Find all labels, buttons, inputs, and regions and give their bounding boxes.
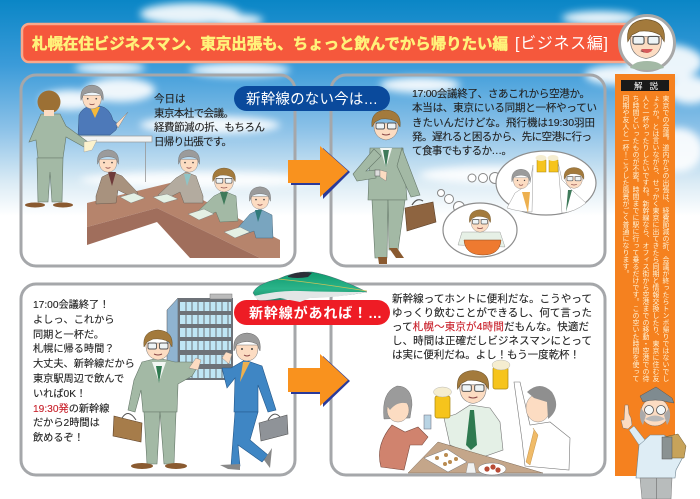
arrow: bottom [288, 354, 350, 407]
speech text: 大丈夫、新幹線だから [33, 357, 135, 370]
sidebar vertical text: 東京での会議。道内からの出張は、経費節減の折、会議が終ったらトンボ帰りではないでし [661, 95, 668, 382]
sidebar vertical text: ょうか。とは言いながら、せっかく東京に出てきたら同期と情報交換したり、東京に住む友 [651, 95, 658, 382]
icon: man in green suit waving [128, 330, 201, 469]
icon: standing man from behind [25, 90, 97, 208]
speech text: ゆっくり飲むことができるし、何て言った [392, 306, 592, 319]
panel: drinking before shinkansen [21, 284, 295, 475]
speech text: って札幌～東京が4時間だもんな。快適だ [392, 321, 589, 333]
panel: flying back without shinkansen [331, 75, 605, 266]
speech text: 飲めるぞ！ [33, 431, 84, 444]
speech text: 今日は [154, 92, 186, 105]
icon: man with orange tie raising beer [492, 360, 570, 470]
speech text: 日帰り出張です。 [154, 135, 232, 148]
icon: seated managers [96, 150, 273, 238]
icon: office building [167, 294, 233, 380]
thought bubble: eating ramen [438, 190, 517, 257]
speech text: きたいんだけどな。飛行機は19:30羽田 [412, 116, 595, 129]
speech text: 新幹線ってホントに便利だな。こうやって [392, 292, 592, 305]
speech text: 東京駅周辺で飲んで [33, 372, 124, 385]
speech text: 東京本社で会議。 [154, 106, 234, 120]
table documents [120, 193, 250, 238]
icon: woman with glass [379, 386, 431, 470]
label: without shinkansen [234, 86, 390, 111]
speech text: 札幌に帰る時間？ [33, 342, 114, 355]
title tag: [ビジネス編] [515, 34, 608, 52]
thought bubble: beer toast [468, 151, 596, 215]
conference table [87, 183, 280, 258]
sidebar vertical text: 同期や友人と一杯！こうした風景がごく普通になります。 [621, 95, 628, 277]
title banner [22, 24, 642, 62]
panel: meeting at head office [21, 75, 295, 266]
icon: grey briefcase [259, 414, 288, 441]
speech text: 経費節減の折、もちろん [154, 120, 265, 134]
icon: man checking watch [353, 110, 420, 264]
icon: shinkansen train [253, 272, 367, 302]
sidebar vertical text: ち時間といったものが不要。時間までに駅に行って乗るだけです。この空いた時間を使って [631, 95, 638, 382]
label: with shinkansen [234, 300, 390, 325]
speech text: は実に便利だね。よし！もう一度乾杯！ [392, 348, 580, 361]
table with food [408, 442, 543, 475]
icon: presenter woman [78, 85, 128, 135]
speech text: て食事でもするか…。 [412, 144, 512, 157]
panel: with shinkansen [331, 284, 605, 475]
speech text: 同期と一杯だ。 [33, 328, 104, 341]
speech text: 本当は、東京にいる同期と一杯やってい [412, 101, 597, 114]
panel: explanation sidebar [615, 74, 675, 476]
icon: man with green tie holding beer [434, 370, 503, 458]
speech text: よしっ、これから [33, 314, 114, 326]
icon: narrator portrait [620, 16, 674, 70]
icon: man in blue suit walking [220, 333, 276, 470]
speech text: 19:30発の新幹線 [33, 404, 109, 415]
sidebar vertical text: 人と一杯やったりしたいですね。新幹線なら、オフィス街から空港までの移動・空港での待 [641, 95, 648, 382]
label: without shinkansen: 新幹線のない今は… [246, 91, 378, 108]
whiteboard stand [78, 136, 152, 182]
icon: briefcase [405, 200, 436, 231]
speech text: だから2時間は [33, 417, 100, 429]
sidebar vertical text [621, 95, 670, 382]
icon: brown briefcase [113, 413, 142, 442]
speech text: 発。遅れると困るから、先に空港に行っ [412, 130, 592, 143]
title text: 札幌在住ビジネスマン、東京出張も、ちょっと飲んでから帰りたい編 [32, 34, 508, 53]
label: with shinkansen: 新幹線があれば！… [249, 305, 382, 321]
speech text: いれば0K！ [33, 388, 86, 400]
icon: professor with book [621, 387, 686, 499]
sidebar heading: 解 説 [634, 81, 658, 91]
speech text: 17:00会議終了、さあこれから空港か。 [412, 87, 590, 100]
arrow: top [288, 146, 350, 199]
speech text: 17:00会議終了！ [33, 298, 109, 311]
speech text: し、時間は正確だしビジネスマンにとって [392, 334, 592, 347]
sidebar heading [621, 80, 669, 91]
